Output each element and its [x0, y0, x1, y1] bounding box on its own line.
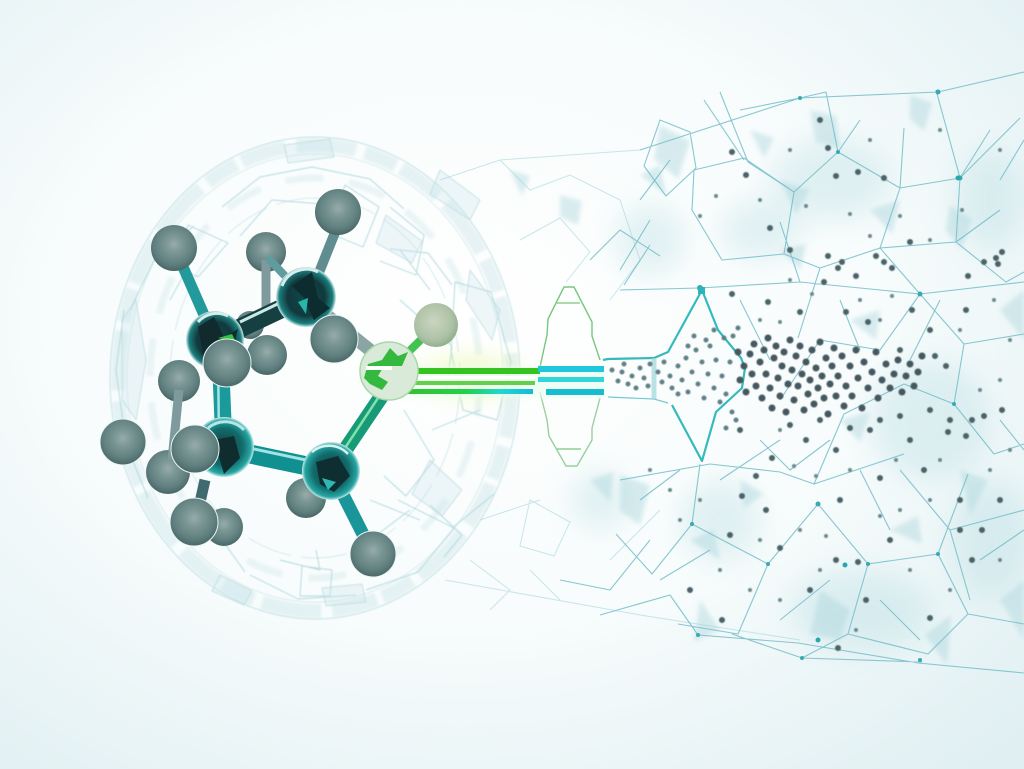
- rear spheres behind bonds: [146, 232, 287, 494]
- network: pale patches: [510, 95, 1024, 665]
- bonds: [172, 225, 436, 552]
- upper and lower outer spheres: [151, 189, 361, 546]
- energy beam: [385, 342, 605, 410]
- emphasized teal funnel: [603, 287, 745, 461]
- network: thin mesh lines: [560, 72, 1024, 673]
- front spheres: [100, 315, 396, 577]
- network: node dots: [690, 90, 962, 662]
- network: soft haze: [570, 140, 1024, 650]
- dissolving particles: funnel clumps: [612, 328, 738, 428]
- molecule: [100, 189, 458, 577]
- chrome joint: green end: [360, 342, 418, 400]
- wireframe sphere: [110, 137, 520, 619]
- faint connection lines from sphere to network: [440, 150, 800, 640]
- scattered particles: [690, 120, 1002, 648]
- chrome joints: [186, 267, 360, 500]
- green outlined gate: [540, 287, 600, 466]
- dissolving particles: core cluster: [738, 338, 922, 414]
